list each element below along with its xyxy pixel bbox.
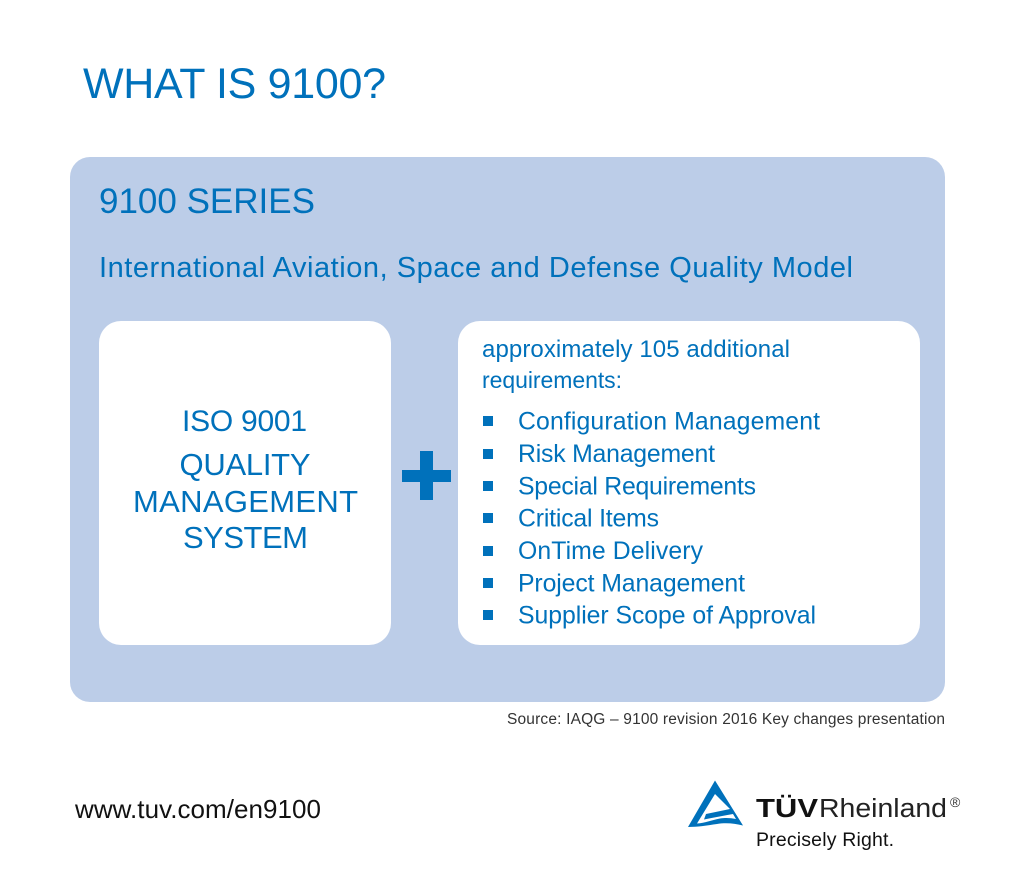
bullet list: OnTime Delivery	[518, 538, 704, 565]
website url: www.tuv.com/en9100	[74, 794, 321, 824]
title: WHAT IS 9100?	[83, 60, 386, 108]
wordmark	[756, 794, 947, 823]
quality management system label: MANAGEMENT	[133, 484, 358, 519]
bullet list: Special Requirements	[518, 474, 756, 500]
tagline: Precisely Right.	[756, 829, 894, 851]
source note: Source: IAQG – 9100 revision 2016 Key changes presentation	[507, 711, 945, 728]
panel: 9100 series	[70, 157, 945, 702]
bullet list: Critical Items	[518, 506, 659, 532]
bullet list: Project Management	[518, 570, 745, 598]
quality management system label: QUALITY	[180, 447, 310, 482]
panel subheading: International Aviation, Space and Defense Quality Model	[99, 252, 853, 284]
logo: TÜV Rheinland	[688, 780, 961, 851]
bullet list: Risk Management	[518, 441, 715, 468]
panel heading: 9100 SERIES	[99, 182, 315, 221]
quality management system label	[133, 447, 358, 555]
card: additional requirements	[458, 321, 920, 645]
registered mark: ®	[950, 794, 961, 810]
requirements intro	[482, 336, 790, 393]
requirements intro: requirements:	[482, 367, 622, 393]
requirements intro: approximately 105 additional	[482, 336, 790, 363]
bullet list	[483, 408, 820, 630]
bullet list: Supplier Scope of Approval	[518, 602, 816, 630]
icon: blue triangle	[688, 780, 743, 827]
wordmark: Rheinland	[819, 795, 947, 823]
card: ISO 9001	[99, 321, 391, 645]
icon: plus sign	[402, 451, 451, 500]
ISO 9001 label: ISO 9001	[182, 405, 307, 438]
quality management system label: SYSTEM	[183, 520, 308, 555]
wordmark: TÜV	[756, 794, 818, 823]
bullet list: Configuration Management	[518, 408, 820, 436]
